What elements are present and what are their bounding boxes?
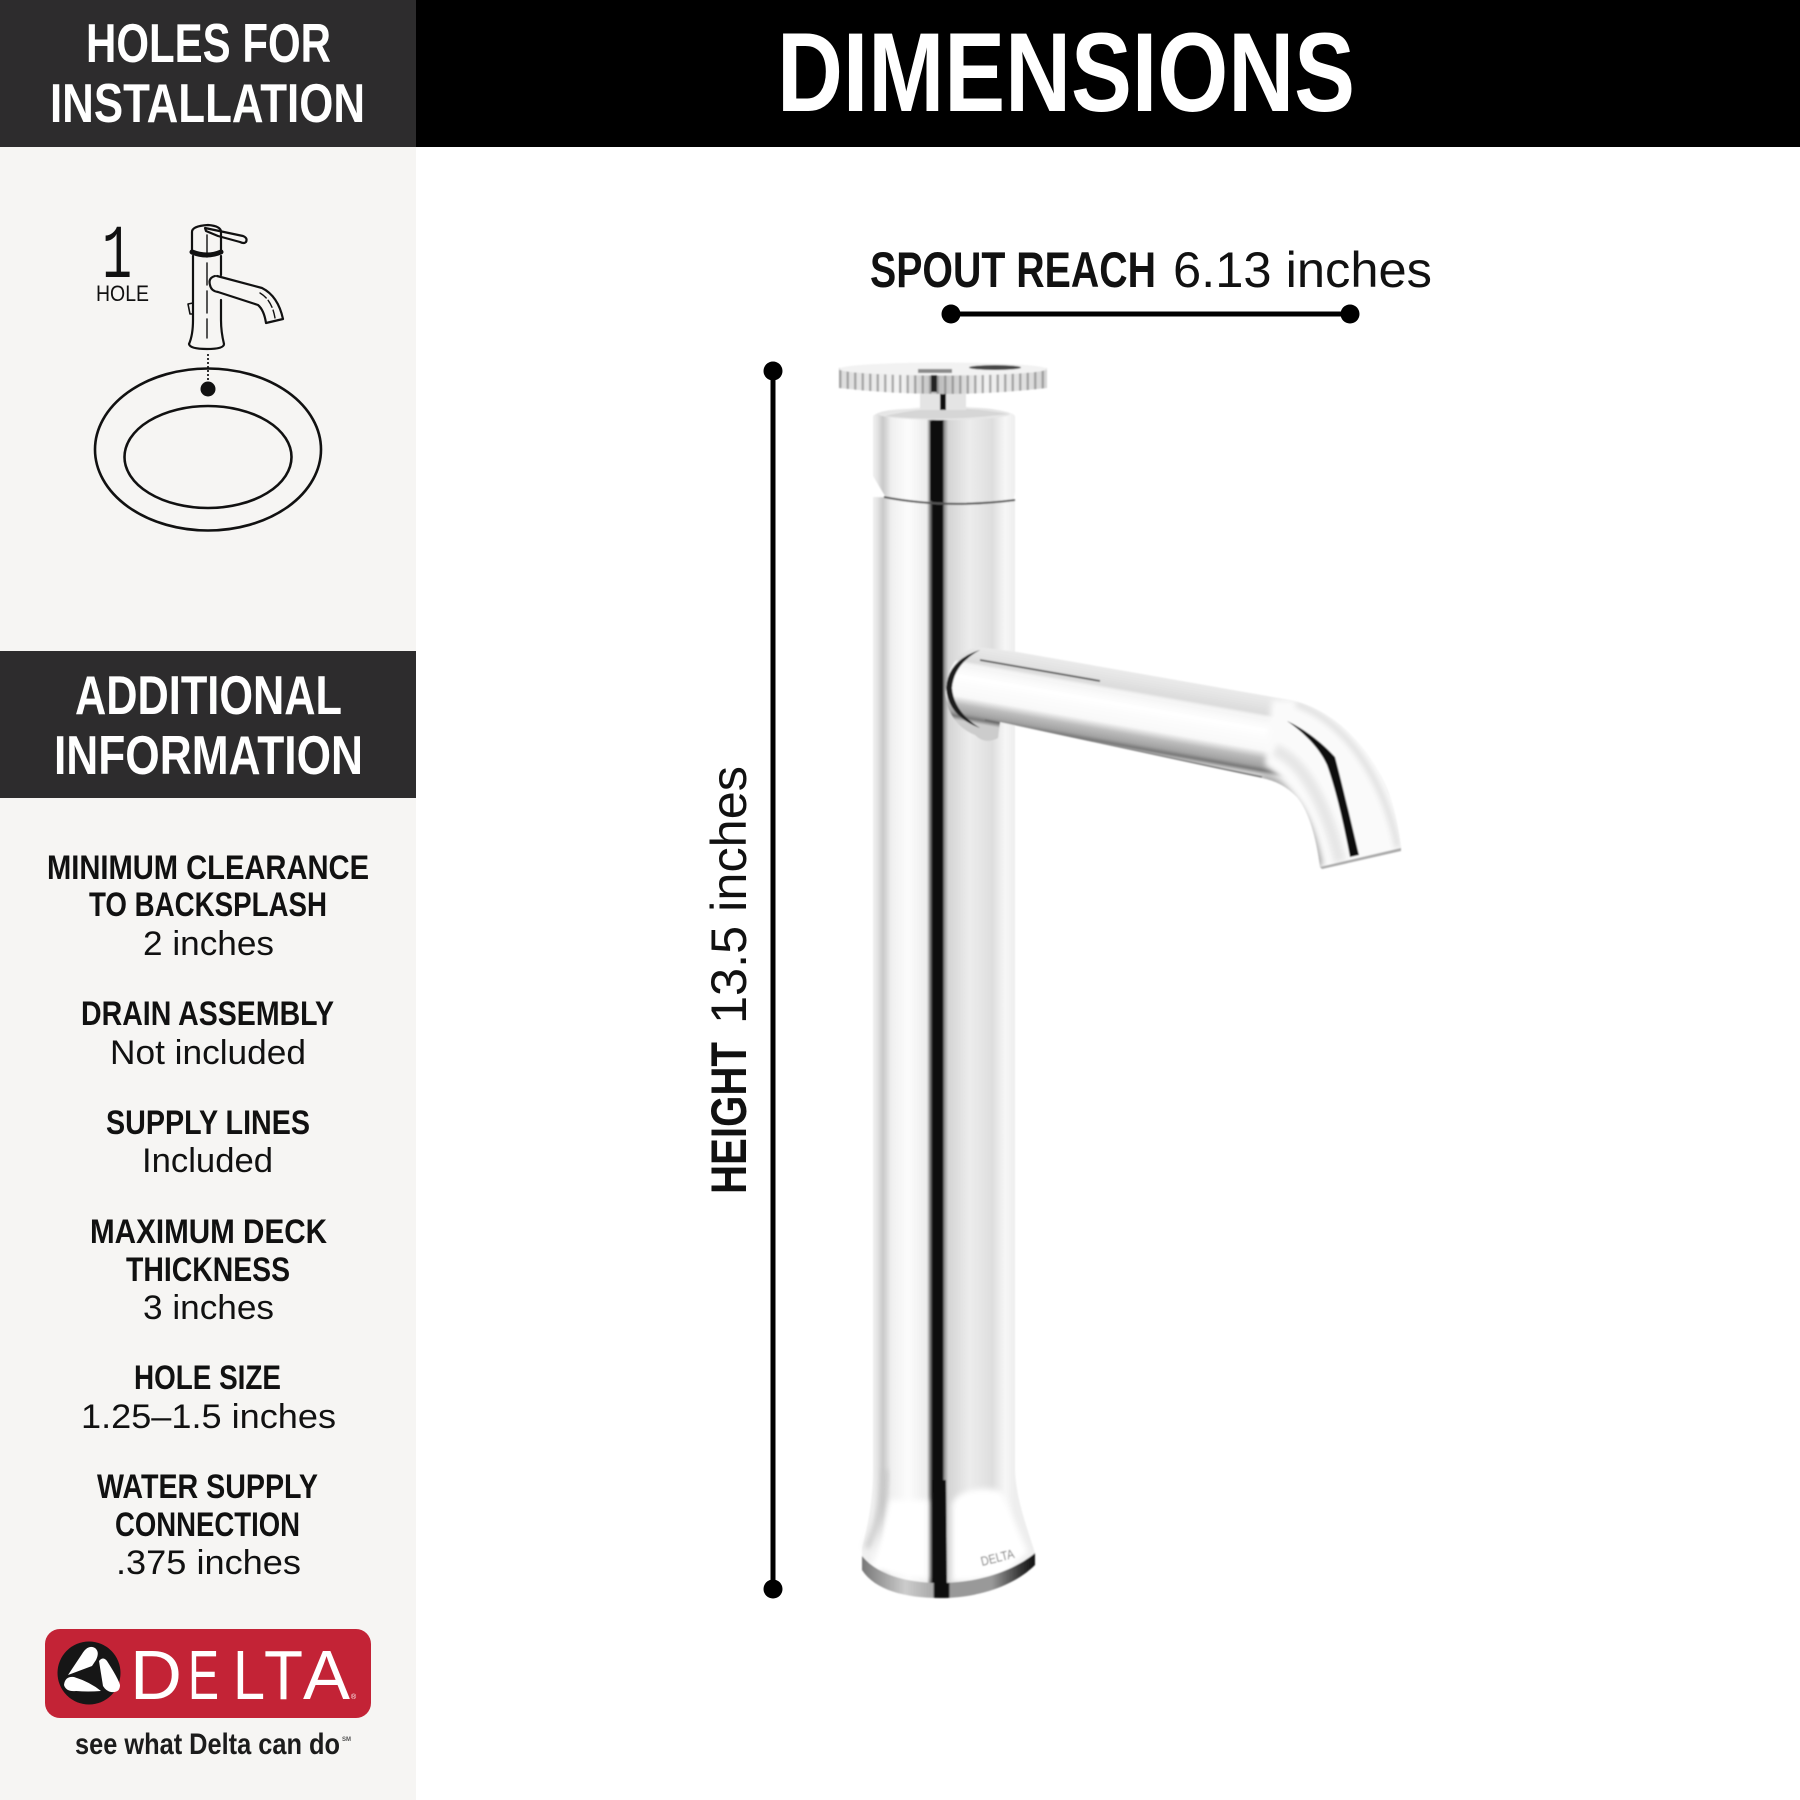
spec: supply lines: SUPPLY LINES	[106, 1104, 310, 1142]
handle stem	[920, 390, 966, 410]
faucet body column	[862, 497, 1035, 1598]
spec: minimum clearance	[47, 849, 369, 963]
text: DELTA wordmark: E	[188, 1636, 219, 1714]
spec: drain assembly: DRAIN ASSEMBLY	[81, 995, 334, 1033]
illustration: chrome faucet	[839, 362, 1420, 1598]
spec: maximum deck thickness	[90, 1213, 327, 1327]
tagline: see what Delta can do	[75, 1728, 340, 1761]
heading: additional information: INFORMATION	[54, 724, 363, 786]
heading: dimensions	[416, 0, 1800, 147]
spec: hole size: HOLE SIZE	[134, 1359, 281, 1397]
heading: holes for installation	[0, 0, 416, 147]
icon: Delta emblem	[58, 1642, 120, 1704]
label: height	[701, 766, 757, 1194]
tagline: SM	[342, 1737, 351, 1743]
icon: faucet line drawing	[188, 225, 283, 349]
label: spout reach	[870, 242, 1432, 298]
spec: supply lines: Included	[142, 1142, 273, 1180]
heading: dimensions: DIMENSIONS	[777, 10, 1355, 135]
text: registered mark: ®	[351, 1693, 357, 1701]
text: 1 hole: HOLE	[96, 281, 149, 306]
label: spout reach: SPOUT REACH	[870, 242, 1156, 298]
spec: minimum clearance: TO BACKSPLASH	[89, 886, 327, 924]
spec: hole size: 1.25–1.5 inches	[81, 1398, 336, 1436]
spec: drain assembly: Not included	[110, 1034, 306, 1072]
text: DELTA wordmark: A	[303, 1636, 350, 1714]
arrow: spout reach dimension line	[942, 304, 1360, 324]
faucet spout	[930, 630, 1420, 880]
logo: Delta	[45, 1629, 371, 1718]
text: 1 hole: 1	[102, 214, 132, 300]
sidebar panel	[0, 0, 416, 1800]
text: DELTA wordmark: L	[233, 1636, 265, 1714]
text: DELTA wordmark: T	[264, 1636, 303, 1714]
heading: holes for installation: INSTALLATION	[50, 72, 365, 134]
spec: water supply connection: WATER SUPPLY	[97, 1468, 318, 1506]
base flare highlights	[867, 1470, 1028, 1582]
spec: drain assembly	[81, 995, 334, 1072]
heading: holes for installation: HOLES FOR	[86, 12, 331, 74]
spec: minimum clearance: 2 inches	[143, 925, 274, 963]
spec: water supply connection: CONNECTION	[115, 1506, 300, 1544]
spec: hole size	[81, 1359, 336, 1436]
DELTA mark on base: DELTA	[979, 1546, 1016, 1569]
base rim	[862, 1553, 1035, 1598]
spec: maximum deck thickness: 3 inches	[143, 1289, 274, 1327]
label: spout reach: 6.13 inches	[1173, 242, 1432, 298]
knurled wheel handle	[839, 362, 1047, 394]
spec: minimum clearance: MINIMUM CLEARANCE	[47, 849, 369, 887]
spec: supply lines	[106, 1104, 310, 1180]
label: height: HEIGHT	[701, 1042, 757, 1194]
arrow: height dimension line	[764, 362, 782, 1598]
panel: hole diagram	[95, 214, 321, 530]
panel: additional information list	[47, 849, 369, 1582]
heading: additional information: ADDITIONAL	[75, 664, 342, 726]
spec: maximum deck thickness: THICKNESS	[126, 1251, 290, 1289]
spec: water supply connection	[97, 1468, 318, 1582]
text: DELTA wordmark: D	[130, 1636, 182, 1714]
heading: additional information	[0, 651, 416, 798]
icon: sink with one hole	[95, 354, 321, 530]
spec: water supply connection: .375 inches	[116, 1544, 301, 1582]
spec: maximum deck thickness: MAXIMUM DECK	[90, 1213, 327, 1251]
faucet cap	[873, 406, 1015, 504]
label: height: 13.5 inches	[701, 766, 757, 1024]
